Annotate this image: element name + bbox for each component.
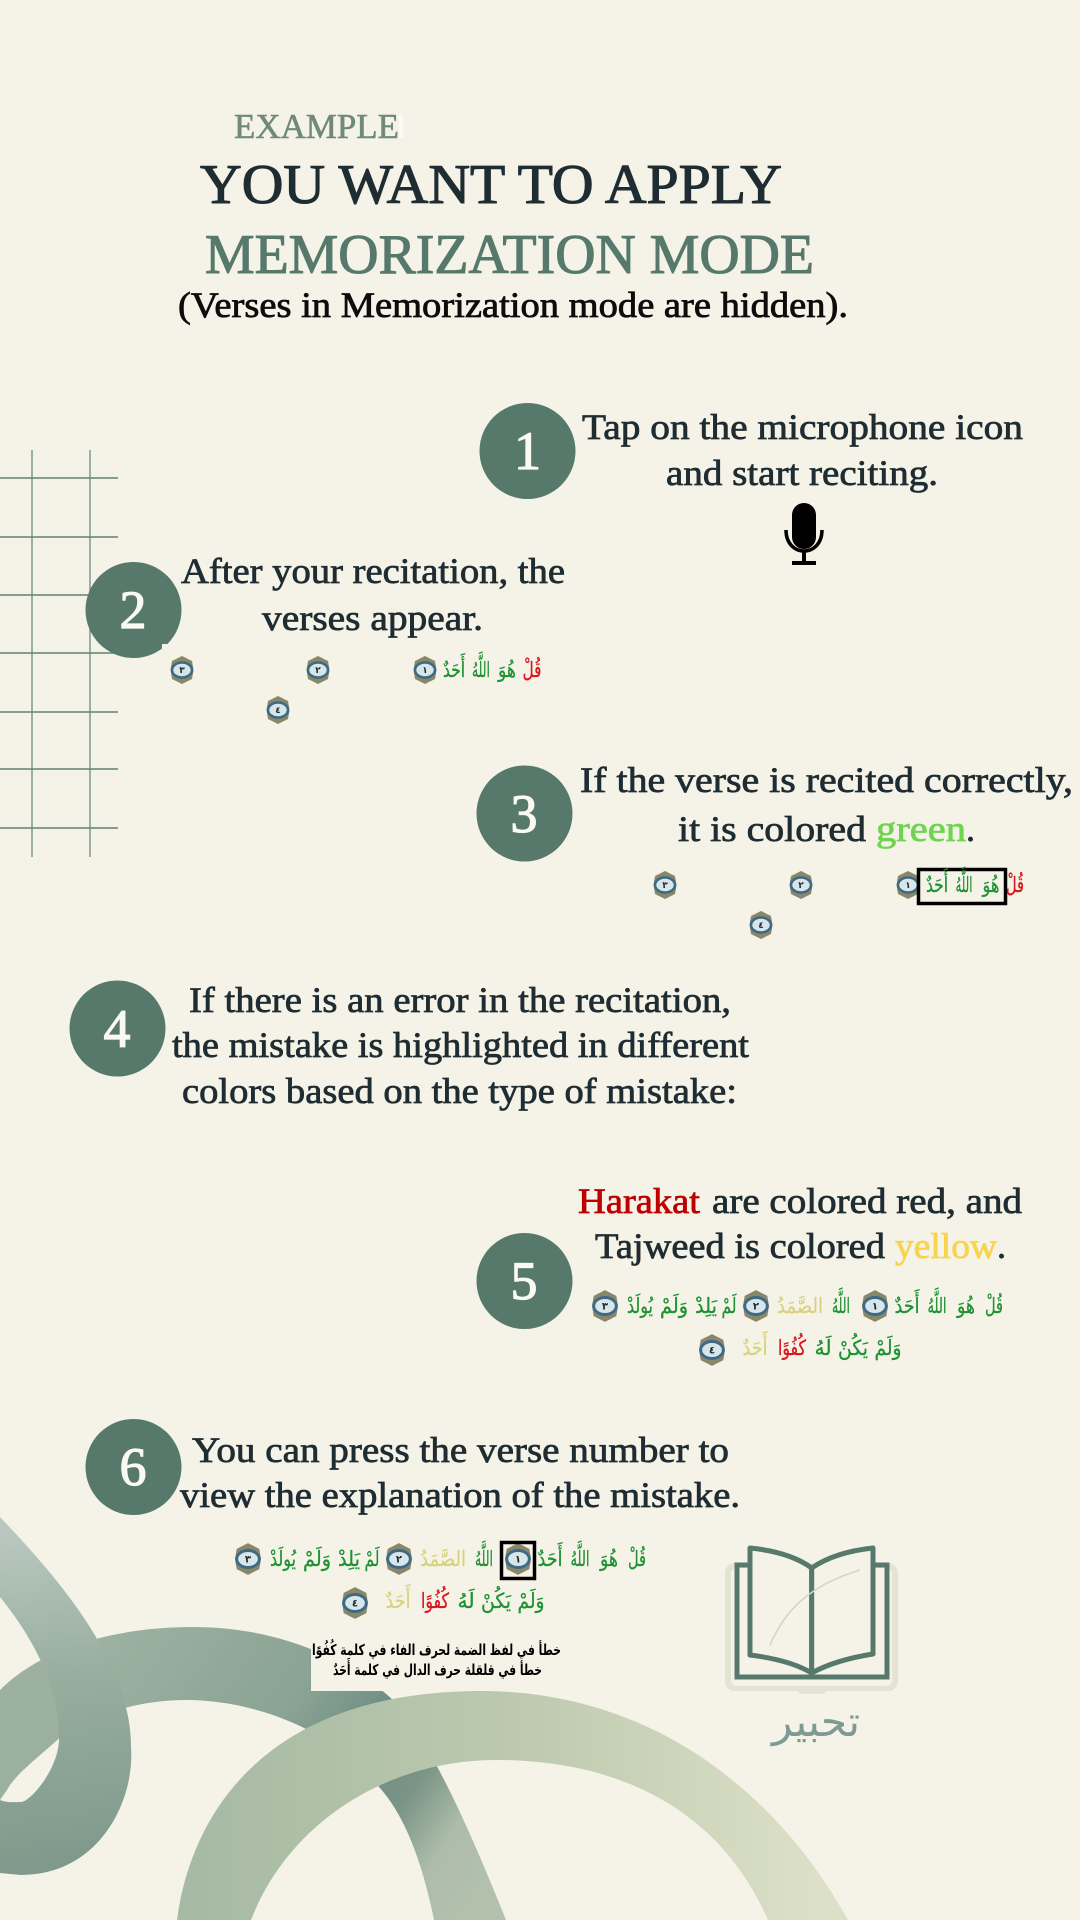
verse sample: first verse revealed: ٣	[179, 666, 185, 676]
verse sample: verse number selected: الصَّمَدُ	[420, 1547, 466, 1571]
verse sample: mistakes coloured: أَحَدٌ	[742, 1331, 768, 1360]
panel: step 6	[86, 1419, 740, 1691]
step 2 text: After your recitation, the	[181, 551, 565, 591]
verse sample: correct verse highlighted: هُوَ	[982, 873, 1000, 897]
verse sample: correct verse highlighted: اللَّهُ	[956, 865, 972, 897]
verse sample: correct verse highlighted: ١	[905, 881, 911, 891]
step 3 text	[580, 760, 1073, 849]
verse sample: first verse revealed: هُوَ	[497, 658, 516, 682]
number badge 4	[70, 980, 166, 1076]
verse sample: verse number selected: ٣	[245, 1554, 252, 1565]
verse sample: mistakes coloured: هُوَ	[956, 1294, 975, 1318]
small label: EXAMPLE: EXAMPLE	[234, 107, 399, 146]
step 1 text: Tap on the microphone icon	[582, 407, 1023, 447]
verse sample: correct verse highlighted	[654, 865, 1024, 939]
verse sample: first verse revealed: أَحَدٌ	[443, 653, 466, 682]
verse sample: verse number selected: ٢	[396, 1554, 403, 1565]
callout: mistake explanation	[311, 1627, 565, 1691]
small white smudge beside EXAMPLE	[399, 115, 403, 138]
number badge 3: 3	[510, 784, 538, 844]
step 4 text: colors based on the type of mistake:	[182, 1071, 737, 1111]
step 5 text: yellow	[895, 1226, 997, 1266]
verse sample: verse number selected: اللَّهُ	[570, 1539, 590, 1571]
verse sample: first verse revealed: ٤	[275, 706, 281, 716]
verse sample: mistakes coloured: ٢	[753, 1301, 760, 1312]
step 4 text: If there is an error in the recitation,	[189, 980, 731, 1020]
step 1 text: and start reciting.	[666, 453, 938, 493]
callout: mistake explanation: خطأ في قلقلة حرف الدال في كلمة أَحَدٌ	[333, 1657, 542, 1679]
verse sample: mistakes coloured	[592, 1286, 1003, 1366]
verse sample: correct verse highlighted: ٤	[758, 921, 764, 931]
verse sample: mistakes coloured: ١	[872, 1301, 878, 1312]
verse sample: verse number selected: ٤	[352, 1598, 358, 1609]
verse sample: verse number selected: هُوَ	[599, 1547, 618, 1571]
verse sample: verse number selected: أَحَدٌ	[538, 1542, 563, 1571]
number badge 2	[86, 562, 184, 662]
verse sample: correct verse highlighted: ٢	[798, 881, 804, 891]
verse sample: mistakes coloured: لَهُ	[814, 1335, 832, 1360]
verse sample: verse number selected: يَكُنْ	[481, 1585, 512, 1613]
verse sample: mistakes coloured: وَلَمْ	[660, 1293, 688, 1319]
number badge 6	[86, 1419, 182, 1515]
panel: step 2	[86, 551, 565, 724]
verse sample: verse number selected: كُفُوًا	[421, 1585, 449, 1613]
verse sample: verse number selected: لَهُ	[458, 1588, 475, 1613]
verse sample: first verse revealed	[170, 650, 542, 724]
number badge 1: 1	[514, 421, 541, 481]
number badge 5: 5	[510, 1251, 538, 1311]
verse sample: first verse revealed: ١	[422, 666, 428, 676]
step 3 text: green	[876, 809, 966, 849]
step 4 text: the mistake is highlighted in different	[172, 1025, 749, 1065]
callout: mistake explanation: خطأ في لفظ الضمة لحرف الفاء في كلمة كُفُوًا	[312, 1639, 561, 1659]
number badge 2: 2	[120, 580, 146, 640]
verse sample: verse number selected: قُلْ	[628, 1545, 646, 1571]
number badge 3	[476, 766, 572, 862]
verse sample: verse number selected: أَحَدٌ	[386, 1584, 411, 1613]
step 5 text: .	[997, 1226, 1006, 1266]
verse sample: mistakes coloured: لَمْ	[722, 1293, 737, 1319]
step 3 text: .	[966, 809, 975, 849]
verse sample: mistakes coloured: اللَّهُ	[832, 1286, 850, 1318]
verse sample: mistakes coloured: ٣	[602, 1301, 609, 1312]
step 1 text	[582, 407, 1023, 493]
verse sample: mistakes coloured: ٤	[709, 1345, 715, 1356]
panel: step 5	[476, 1181, 1022, 1366]
decorative swirl ribbons	[0, 1517, 848, 1920]
verse sample: mistakes coloured: قُلْ	[985, 1292, 1003, 1318]
verse sample: first verse revealed: اللَّهُ	[472, 650, 490, 682]
verse sample: verse number selected: وَلَمْ	[303, 1546, 331, 1572]
step 3 text: it is colored	[678, 809, 866, 849]
verse sample: mistakes coloured: كُفُوًا	[778, 1332, 806, 1360]
step 5 text: Tajweed is colored	[595, 1226, 885, 1266]
verse sample: verse number selected: وَلَمْ	[518, 1588, 544, 1614]
number badge 5	[476, 1233, 572, 1329]
verse sample: correct verse highlighted: أَحَدٌ	[926, 868, 949, 897]
number badge 1	[480, 403, 576, 499]
step 2 text	[181, 551, 565, 638]
title line: you want to apply: YOU WANT TO APPLY	[200, 154, 782, 216]
verse sample: correct verse highlighted: ٣	[662, 881, 668, 891]
logo: open book with wordmark	[725, 1548, 898, 1746]
verse sample: verse number selected: يُولَدْ	[270, 1546, 297, 1571]
step 2 text: verses appear.	[262, 598, 483, 638]
step 5 text: are colored red, and	[712, 1181, 1022, 1221]
panel: step 4	[70, 980, 749, 1111]
verse sample: correct verse highlighted: قُلْ	[1006, 871, 1024, 897]
logo: open book with wordmark: تحبير	[770, 1697, 860, 1746]
verse sample: verse number selected: ١	[515, 1554, 521, 1565]
panel: step 1	[480, 403, 1023, 565]
number badge 4: 4	[104, 999, 130, 1059]
step 6 text: view the explanation of the mistake.	[180, 1475, 740, 1515]
panel: step 3	[476, 760, 1073, 939]
verse sample: mistakes coloured: يَلِدْ	[695, 1294, 718, 1318]
step 5 text	[578, 1181, 1022, 1266]
step 5 text: Harakat	[578, 1181, 700, 1221]
verse sample: mistakes coloured: أَحَدٌ	[894, 1289, 920, 1318]
verse sample: verse number selected: اللَّهُ	[475, 1539, 493, 1571]
verse sample: verse number selected: يَلِدْ	[338, 1547, 361, 1571]
verse sample: mistakes coloured: يَكُنْ	[838, 1332, 869, 1360]
step 6 text: You can press the verse number to	[192, 1430, 729, 1470]
verse sample: first verse revealed: ٢	[315, 666, 321, 676]
verse sample: mistakes coloured: يُولَدْ	[627, 1293, 654, 1318]
subtitle: (Verses in Memorization mode are hidden).	[178, 285, 848, 325]
grid decoration	[0, 450, 118, 857]
title line: memorization mode: MEMORIZATION MODE	[205, 224, 814, 286]
step 4 text	[172, 980, 749, 1111]
verse sample: verse number selected	[235, 1539, 646, 1619]
number badge 6: 6	[120, 1437, 146, 1497]
step 6 text	[180, 1430, 740, 1515]
verse sample: mistakes coloured: وَلَمْ	[874, 1335, 902, 1361]
verse sample: first verse revealed: قُلْ	[522, 656, 542, 682]
verse sample: verse number selected: لَمْ	[364, 1546, 380, 1572]
verse sample: mistakes coloured: اللَّهُ	[928, 1286, 946, 1318]
verse sample: mistakes coloured: الصَّمَدُ	[777, 1294, 823, 1318]
icon: microphone	[786, 503, 822, 565]
step 3 text: If the verse is recited correctly,	[580, 760, 1073, 800]
